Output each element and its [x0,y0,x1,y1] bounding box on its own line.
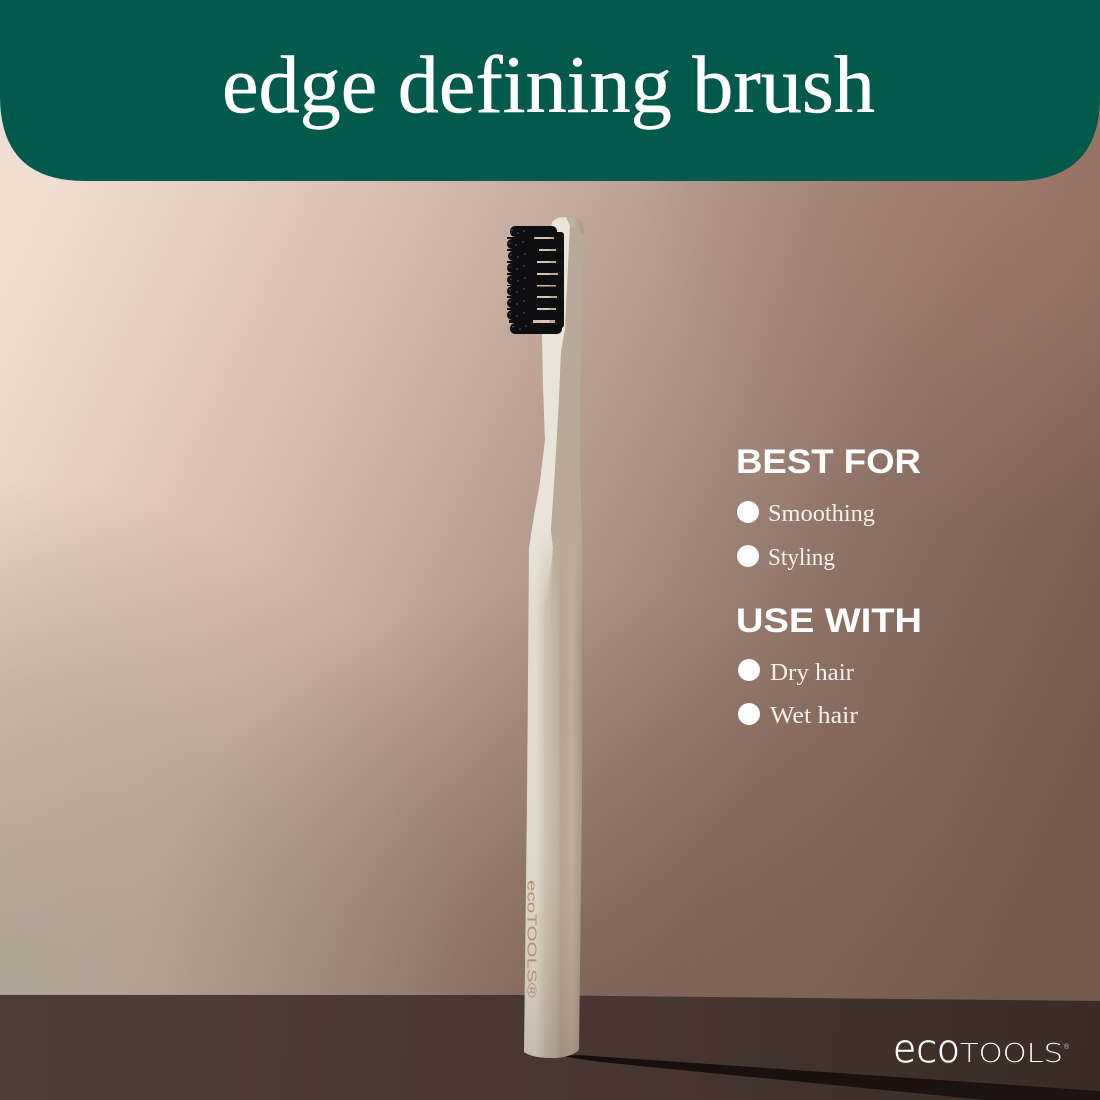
item: styling: Styling [768,545,835,571]
bristle tips [509,229,527,330]
item: dry hair: Dry hair [770,660,854,686]
logo: eco [893,1027,960,1071]
logo: ® [1063,1043,1070,1051]
darker facet [551,226,584,530]
handle [524,217,584,1058]
item: styling [737,545,835,571]
item: wet hair: Wet hair [770,703,858,729]
table surface [0,995,1100,1100]
bristle highlights [533,237,558,323]
item: smoothing: Smoothing [768,501,875,527]
panel: best for [736,443,921,571]
light facet [532,217,570,530]
bristles [507,226,564,334]
brush [507,217,584,1058]
title: edge defining brush [222,39,875,130]
heading: use with: USE WITH [736,602,922,640]
logo [893,1027,1070,1071]
brush shadow [560,1055,1100,1100]
logo: TOOLS [960,1039,1063,1069]
title banner [0,0,1100,181]
panel: use with [736,602,922,729]
item: wet hair [738,703,858,729]
handle imprint: ecoTOOLS® [524,880,540,999]
heading: best for: BEST FOR [736,443,921,481]
item: dry hair [738,659,854,686]
